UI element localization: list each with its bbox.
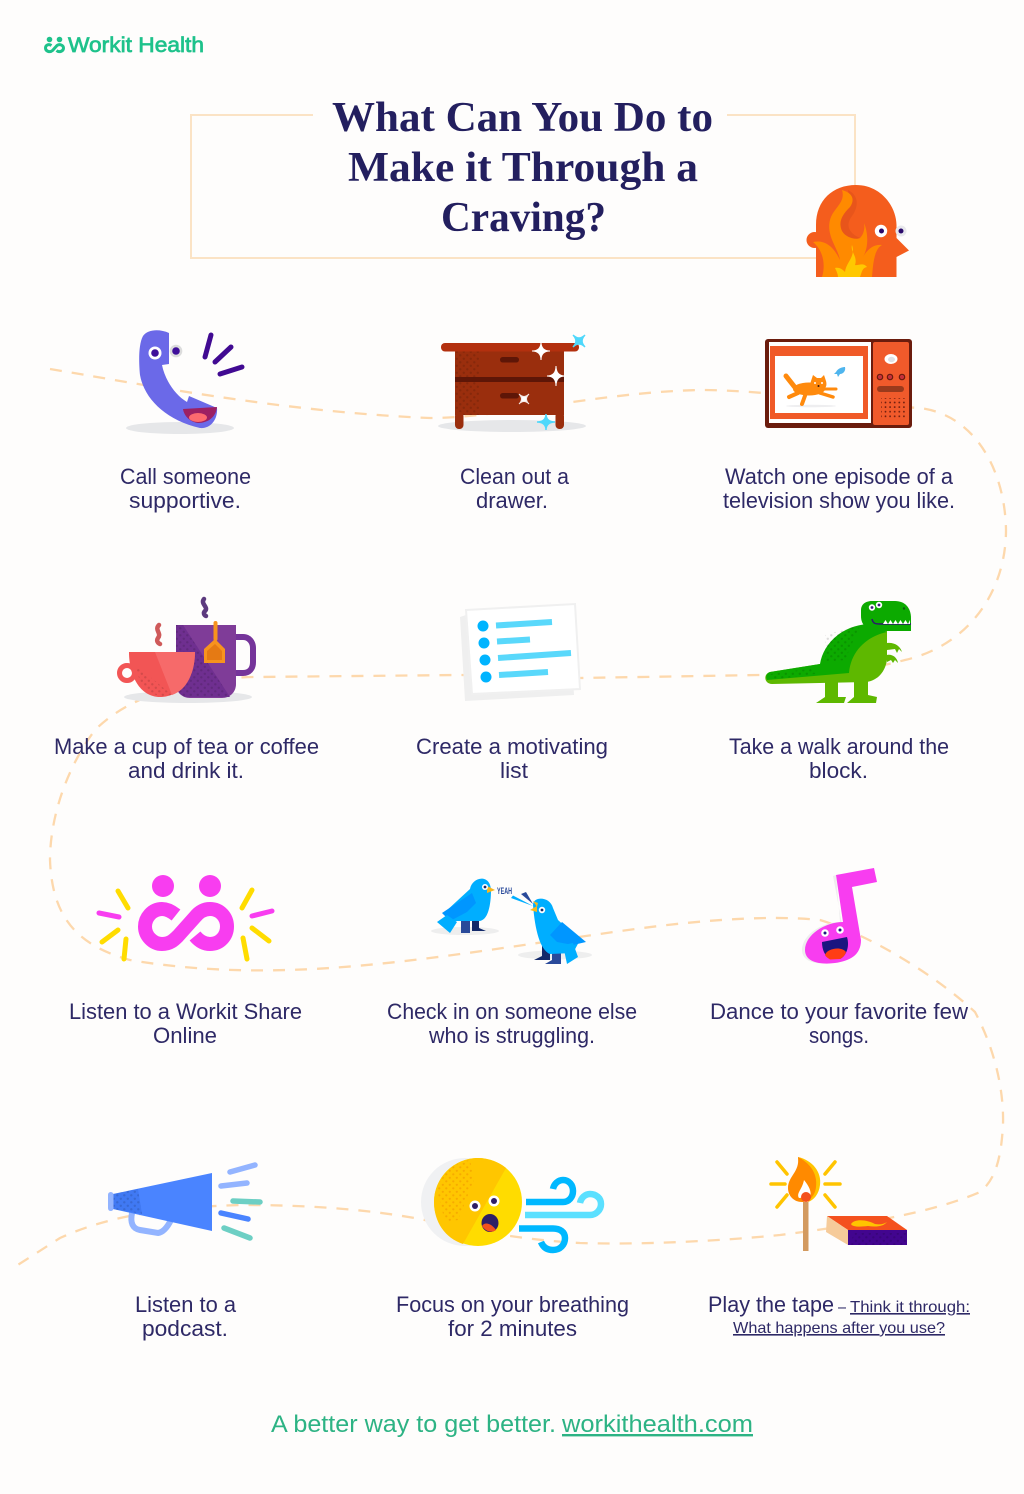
caption: and drink it. bbox=[128, 758, 244, 783]
icon: head on fire bbox=[806, 185, 909, 277]
dashed path connecting the activities bbox=[13, 369, 1006, 1268]
footer tagline: workithealth.com bbox=[561, 1411, 753, 1438]
panel: take a walk bbox=[729, 601, 949, 783]
caption: Play the tape bbox=[708, 1292, 834, 1317]
caption: podcast. bbox=[142, 1316, 228, 1341]
panel: clean out a drawer bbox=[438, 335, 586, 513]
icon: mug and cup bbox=[120, 599, 253, 703]
caption: Online bbox=[153, 1023, 217, 1048]
panel: watch television bbox=[723, 339, 955, 513]
caption bbox=[69, 999, 302, 1048]
icon: blowing sun face bbox=[421, 1158, 601, 1250]
caption: who is struggling. bbox=[428, 1023, 595, 1048]
panel: tea or coffee bbox=[54, 599, 319, 783]
caption bbox=[54, 734, 319, 783]
panel: podcast bbox=[108, 1165, 260, 1341]
caption bbox=[135, 1292, 237, 1341]
logo: Workit Health bbox=[46, 34, 204, 57]
caption: Dance to your favorite few bbox=[710, 999, 968, 1024]
panel: call someone bbox=[120, 330, 251, 513]
title: Make it Through a bbox=[348, 145, 698, 191]
icon: talking birds: YEAH bbox=[497, 886, 512, 896]
caption: list bbox=[500, 758, 528, 783]
caption bbox=[729, 734, 949, 783]
icon: logo mark bbox=[46, 37, 64, 52]
icon: talking phone bbox=[126, 330, 242, 434]
icon: burning match and matchbox bbox=[771, 1157, 907, 1251]
title bbox=[332, 95, 713, 241]
caption: Listen to a Workit Share bbox=[69, 999, 302, 1024]
caption bbox=[708, 1292, 970, 1337]
caption: block. bbox=[809, 758, 868, 783]
caption: drawer. bbox=[476, 488, 548, 513]
icon: workit infinity with rays bbox=[99, 875, 272, 959]
panel: dance bbox=[710, 868, 968, 1048]
caption: Make a cup of tea or coffee bbox=[54, 734, 319, 759]
caption: Take a walk around the bbox=[729, 734, 949, 759]
footer tagline: A better way to get better. bbox=[271, 1411, 556, 1438]
panel: check in on someone bbox=[387, 879, 637, 1048]
logo wordmark: Workit Health bbox=[68, 34, 204, 57]
caption: Watch one episode of a bbox=[725, 464, 954, 489]
caption bbox=[723, 464, 955, 513]
panel: play the tape bbox=[708, 1157, 970, 1337]
panel: motivating list bbox=[416, 604, 608, 783]
panel: workit share bbox=[69, 875, 302, 1048]
caption: supportive. bbox=[129, 488, 241, 513]
icon: retro television with cat bbox=[765, 339, 912, 428]
caption: Think it through: bbox=[850, 1299, 970, 1316]
caption bbox=[460, 464, 570, 513]
title: What Can You Do to bbox=[332, 95, 713, 141]
icon: sparkling drawer bbox=[438, 335, 586, 432]
icon: talking birds bbox=[431, 879, 592, 964]
caption: Call someone bbox=[120, 464, 251, 489]
caption: for 2 minutes bbox=[448, 1316, 577, 1341]
icon: paper list bbox=[460, 604, 580, 701]
footer tagline bbox=[271, 1411, 753, 1438]
caption: Create a motivating bbox=[416, 734, 608, 759]
caption: songs. bbox=[809, 1023, 869, 1048]
caption bbox=[416, 734, 608, 783]
panel: breathing bbox=[396, 1158, 629, 1341]
caption bbox=[710, 999, 968, 1048]
caption bbox=[396, 1292, 629, 1341]
icon: singing music note bbox=[802, 868, 877, 964]
title: Craving? bbox=[441, 195, 606, 241]
caption: – bbox=[838, 1299, 846, 1316]
caption: Check in on someone else bbox=[387, 999, 637, 1024]
caption bbox=[120, 464, 251, 513]
caption: Focus on your breathing bbox=[396, 1292, 629, 1317]
caption: Listen to a bbox=[135, 1292, 237, 1317]
caption: What happens after you use? bbox=[733, 1320, 945, 1337]
icon: t-rex bbox=[765, 601, 911, 703]
icon: megaphone bbox=[108, 1165, 260, 1238]
caption: Clean out a bbox=[460, 464, 570, 489]
caption: television show you like. bbox=[723, 488, 955, 513]
caption bbox=[387, 999, 637, 1048]
title frame bbox=[191, 115, 855, 258]
icon: cat on screen bbox=[786, 367, 845, 407]
